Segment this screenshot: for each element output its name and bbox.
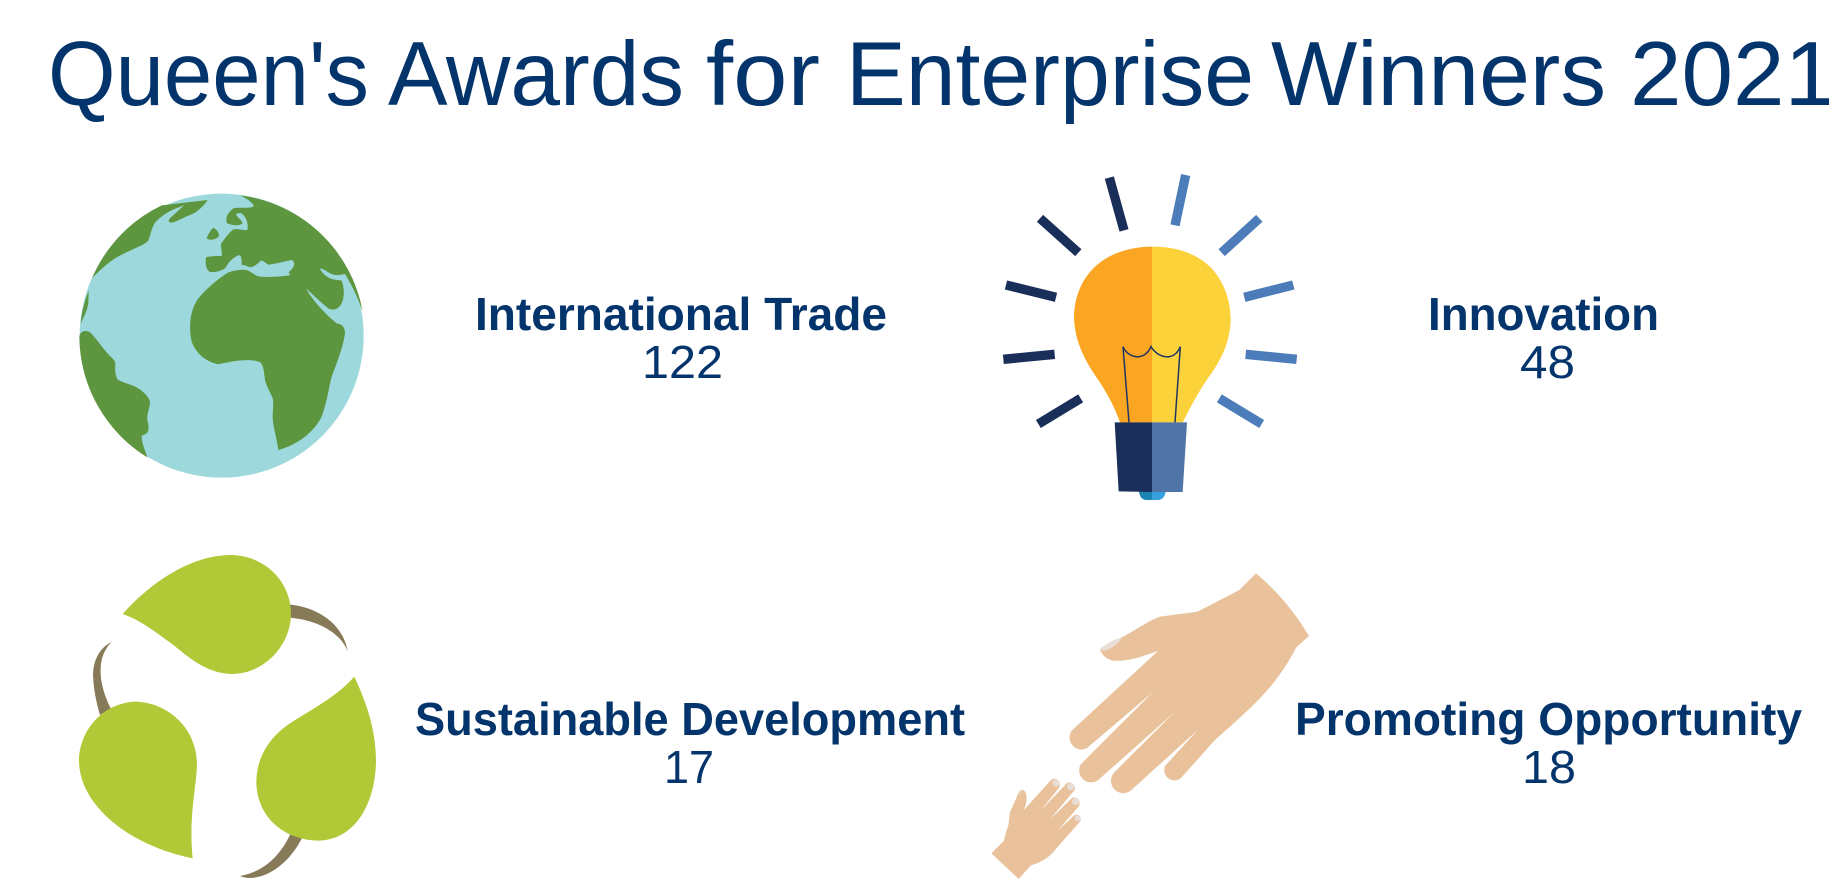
number: 17: 17 bbox=[664, 741, 714, 793]
icon: globe bbox=[79, 194, 364, 478]
heading: international trade: International Trade bbox=[475, 288, 887, 340]
panel: international trade bbox=[79, 194, 887, 478]
title bbox=[48, 24, 1829, 125]
icon: adult and child hands bbox=[991, 573, 1309, 879]
heading: sustainable development: Sustainable Development bbox=[415, 693, 965, 745]
heading: innovation: Innovation bbox=[1428, 288, 1659, 340]
panel: innovation bbox=[1003, 175, 1659, 500]
panel: sustainable development bbox=[79, 555, 965, 878]
number: 48: 48 bbox=[1520, 336, 1575, 388]
icon: light bulb bbox=[1003, 175, 1297, 500]
number: 18: 18 bbox=[1522, 741, 1576, 793]
panel: promoting opportunity bbox=[991, 573, 1802, 879]
title: 2021 bbox=[1630, 24, 1829, 125]
title: Enterprise bbox=[846, 24, 1254, 125]
title: Queen's bbox=[48, 24, 369, 125]
title: Awards bbox=[388, 24, 684, 125]
number: 122: 122 bbox=[642, 336, 723, 388]
title: Winners bbox=[1271, 24, 1606, 125]
title: for bbox=[706, 24, 820, 125]
heading: promoting opportunity: Promoting Opportunity bbox=[1295, 693, 1802, 745]
icon: three leaves bbox=[79, 555, 376, 878]
